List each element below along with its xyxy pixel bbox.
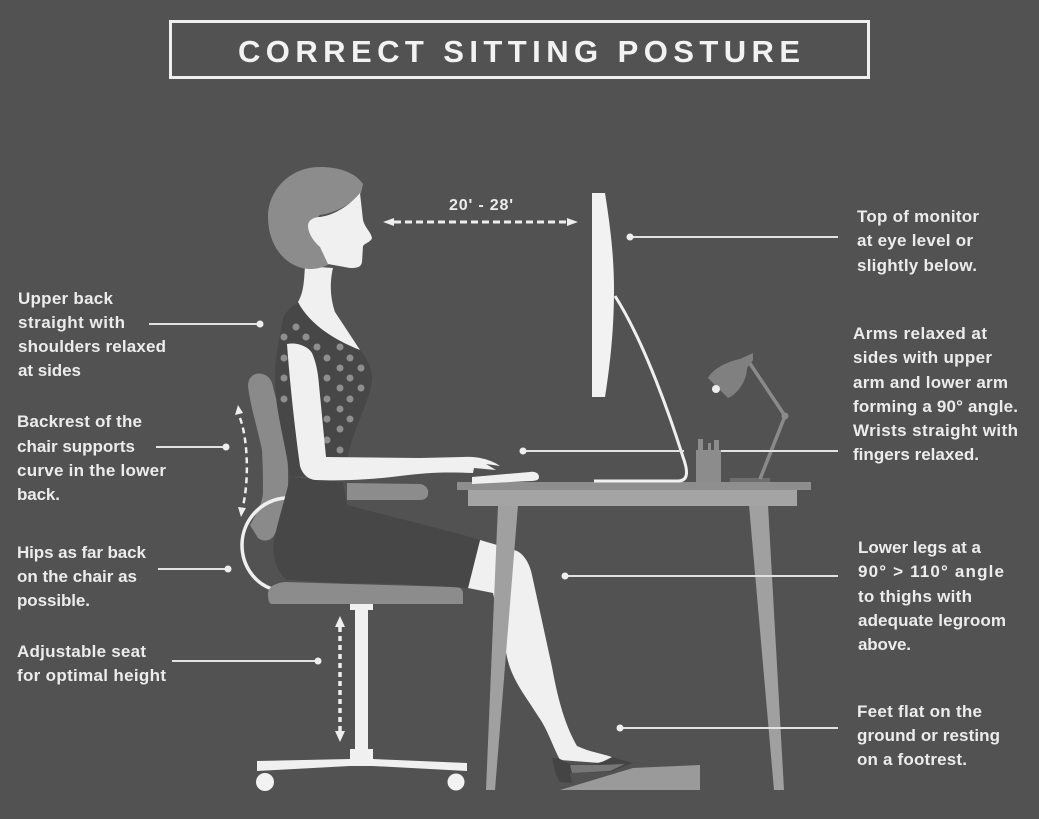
polka dots [280,324,364,454]
footrest [560,765,700,790]
callout: hips [17,543,232,610]
callout: feet: Feet flat on the [857,702,982,721]
seat height arrow [335,616,345,742]
monitor [592,193,687,481]
distance indicator: 20-28 inches: 20' - 28' [449,197,513,214]
callout: backrest: back. [17,485,60,504]
woman figure [268,167,633,783]
distance indicator: 20-28 inches [383,197,578,226]
lower leg [468,540,612,763]
callout: backrest: curve in the lower [17,461,166,480]
callout: feet: ground or resting [857,726,1000,745]
callout: arms: forming a 90° angle. [853,397,1018,416]
monitor screen [592,193,614,397]
callout: adjustable seat: for optimal height [17,666,166,685]
callout: upper back: Upper back [18,289,114,308]
callout: hips: Hips as far back [17,543,147,562]
callout: lower legs: to thighs with [858,587,972,606]
shoe [552,757,633,783]
callout: upper back: at sides [18,361,81,380]
chair [242,374,467,791]
title [170,22,868,78]
callout: upper back [18,289,264,380]
callout: lower legs: adequate legroom [858,611,1006,630]
callout: arms: arm and lower arm [853,373,1008,392]
callout: arms: Arms relaxed at [853,324,987,343]
callout: feet: on a footrest. [857,750,967,769]
callout: monitor height [626,207,979,275]
chair seat [268,582,463,604]
callout: arms: sides with upper [853,348,992,367]
title: CORRECT SITTING POSTURE [238,34,800,69]
callout: monitor height: slightly below. [857,256,977,275]
callout: adjustable seat: Adjustable seat [17,642,146,661]
callout: backrest [17,412,230,504]
callout: backrest: chair supports [17,437,135,456]
desk [457,482,811,790]
callout: upper back: shoulders relaxed [18,337,166,356]
callout: hips: possible. [17,591,90,610]
callout: adjustable seat [17,642,322,685]
backrest curve arrow [235,405,247,517]
callout: upper back: straight with [18,313,125,332]
callout: monitor height: at eye level or [857,231,973,250]
monitor stand [594,296,687,481]
desk legs [486,505,518,790]
skirt [273,477,480,588]
pencil cup [696,439,721,482]
chair wheels [256,773,464,791]
lumbar support curve [242,498,286,589]
callout: lower legs: Lower legs at a [858,538,982,557]
callout: lower legs: above. [858,635,911,654]
callout: arms: Wrists straight with [853,421,1018,440]
callout: arms: fingers relaxed. [853,445,979,464]
arm [287,343,500,480]
callout: monitor height: Top of monitor [857,207,979,226]
desk top [468,490,797,506]
callout: lower legs [562,538,1006,654]
armrest [347,483,428,500]
callout: backrest: Backrest of the [17,412,142,431]
desk lamp [708,353,788,482]
callout: feet [616,702,1000,769]
chair backrest [248,374,288,540]
chair post and base [257,604,467,771]
face [308,193,372,268]
neck and chest [298,266,360,350]
dress top [275,302,372,477]
hair [268,167,363,269]
callout: arms [520,324,1018,464]
callout: lower legs: 90° > 110° angle [858,562,1004,581]
keyboard [472,472,539,484]
callout: hips: on the chair as [17,567,137,586]
